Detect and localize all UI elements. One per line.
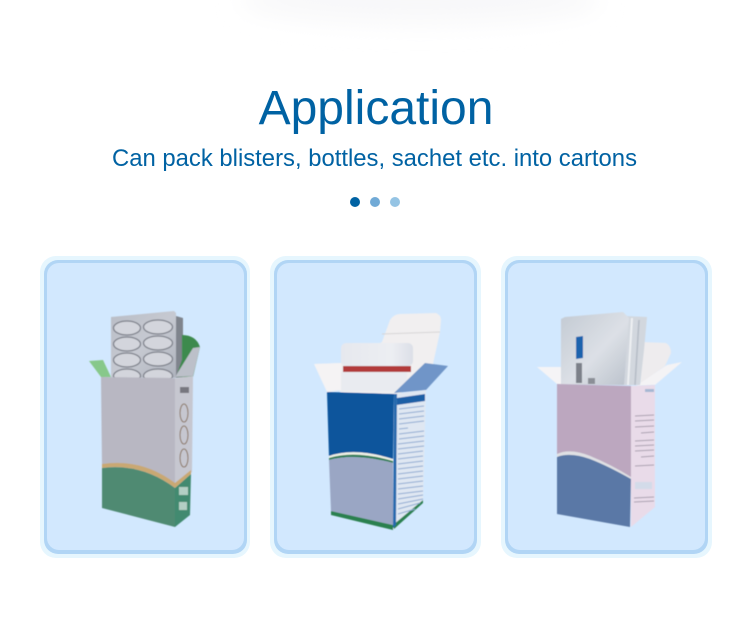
carton <box>557 384 655 527</box>
carton <box>314 313 448 530</box>
subtitle: Can pack blisters, bottles, sachet etc. into cartons <box>112 145 637 172</box>
carton <box>89 335 200 527</box>
title: Application <box>259 82 493 135</box>
sachets <box>561 312 647 385</box>
panel background <box>40 256 250 558</box>
carton flaps <box>537 342 682 386</box>
decorative top shadow <box>240 0 600 24</box>
panel: bottle carton <box>270 256 481 558</box>
panel background <box>501 256 712 558</box>
pagination dots <box>350 197 400 207</box>
panel: blister carton <box>40 256 250 558</box>
panel: sachet carton <box>501 256 712 558</box>
bottle <box>341 343 413 391</box>
panel background <box>270 256 481 558</box>
blister pack <box>111 311 183 383</box>
